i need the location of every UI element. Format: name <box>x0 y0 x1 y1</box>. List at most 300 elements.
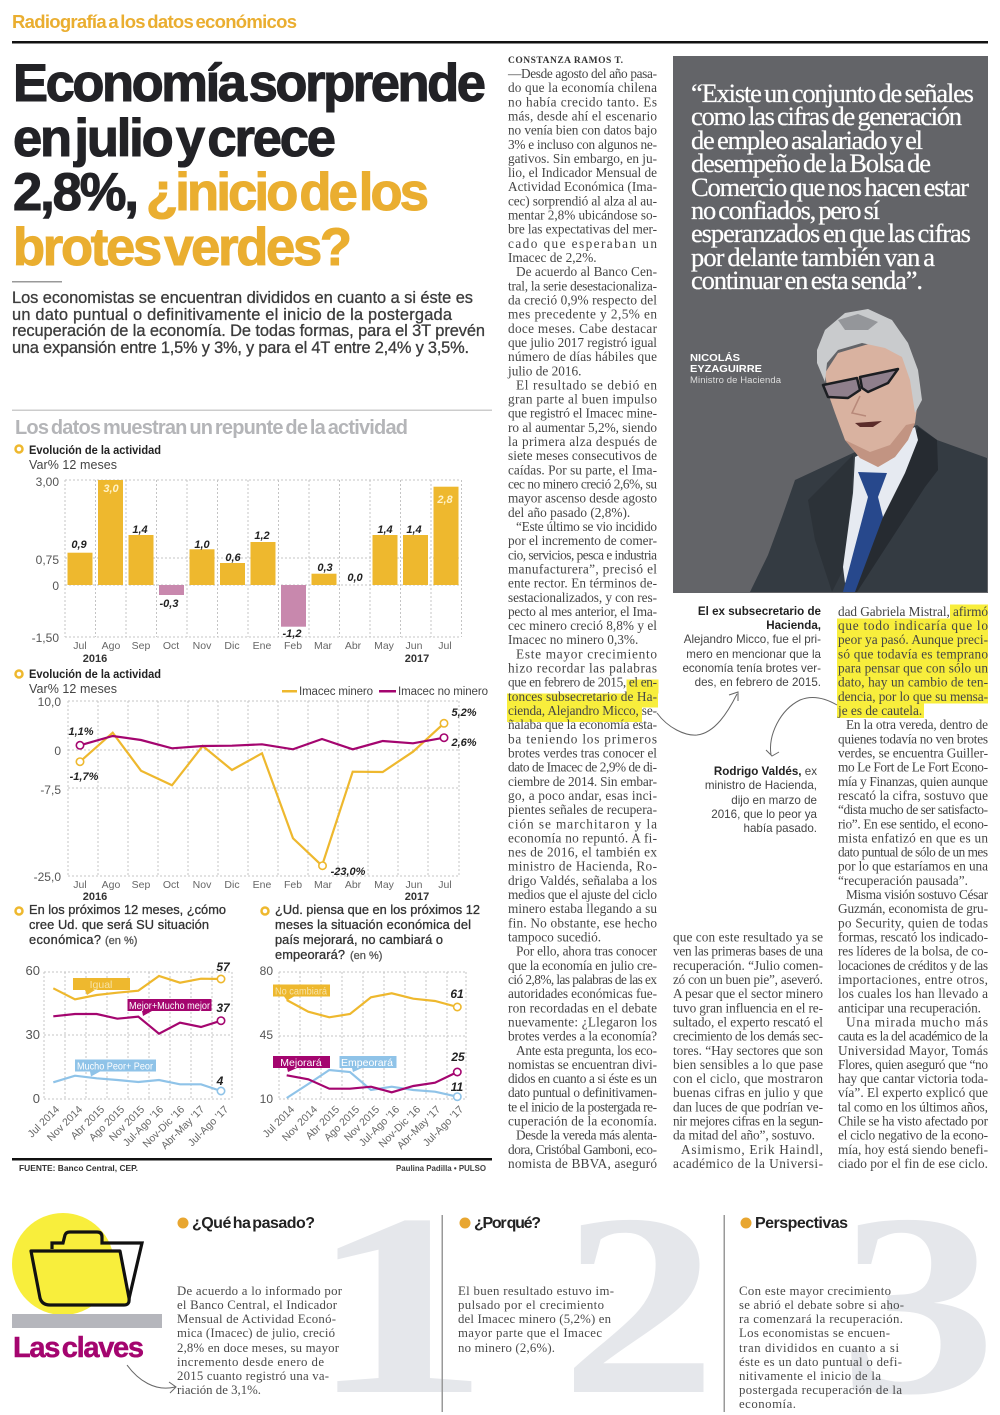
chart: national economic situation survey: país mejorará, no cambiará o <box>275 932 443 947</box>
speaker name: NICOLÁS <box>690 351 740 364</box>
article column 1: siete meses consecutivos de <box>508 448 657 463</box>
article column 2: dan luces de que podrían ve- <box>673 1099 823 1114</box>
chart: personal economic situation survey: Nov-Dic '16 <box>140 1104 187 1150</box>
callout: Rodrigo Valdés: dijo en marzo de <box>731 794 817 807</box>
chart: personal economic situation survey: Jul-Ago '17 <box>186 1104 231 1149</box>
chart: bar chart evolution of activity: 1,4 <box>377 524 393 536</box>
chart: national economic situation survey <box>260 902 480 1152</box>
chart: line chart imacec minero vs no minero: Jul <box>438 879 452 891</box>
quote text: continuar en esta senda”. <box>691 265 923 295</box>
chart: line chart imacec minero vs no minero: Oct <box>163 879 179 891</box>
subheadline: una expansión entre 1,5% y 3%, y para el 4T entre 2,4% y 3,5%. <box>12 339 469 357</box>
chart: personal economic situation survey: Ago 2015 <box>87 1104 127 1144</box>
article column 3: quienes todavía no ven brotes <box>838 731 988 746</box>
article column 3: locaciones de créditos y de las <box>838 958 988 973</box>
chart: national economic situation survey: Jul-Ago '17 <box>421 1104 466 1149</box>
headline: en julio y crece <box>13 109 336 168</box>
label: Igual: Igual <box>90 979 112 991</box>
chart: national economic situation survey: empeorará? <box>275 947 345 962</box>
article column 3: hay que cantar victoria toda- <box>838 1071 988 1086</box>
chart: line chart imacec minero vs no minero: Jun <box>406 879 423 891</box>
article column 1: El resultado se debió en <box>516 377 657 392</box>
subheadline: recuperación de la economía. De todas formas, para el 3T prevén <box>12 322 485 340</box>
chart: bar chart evolution of activity: Dic <box>224 640 240 652</box>
article column 3: que todo indicaría que lo <box>838 618 988 633</box>
article column 1: —Desde agosto del año pasa- <box>507 66 657 81</box>
article column 1: mentar 2,8% ubicándose so- <box>508 208 657 223</box>
chart: bar chart evolution of activity: Nov <box>193 640 212 652</box>
article column 3: dencia, por lo que su mensa- <box>838 689 988 704</box>
article column 3: formas, rescató los indicado- <box>838 930 988 944</box>
article column 1: Actividad Económica (Ima- <box>508 179 657 194</box>
source line <box>12 1158 492 1173</box>
article column 1: da creció 0,9% respecto del <box>508 292 657 308</box>
chart: bar chart evolution of activity <box>16 443 462 665</box>
article column 1: nomistas se encuentran divi- <box>508 1057 657 1072</box>
article column 3: mo Le Fort de Le Fort Econo- <box>838 760 988 775</box>
article column 1: Imacec de 2,2%. <box>508 250 597 265</box>
panel: por qué: no minero (2,6%). <box>458 1341 555 1355</box>
chart: line chart imacec minero vs no minero: May <box>374 879 395 891</box>
chart: personal economic situation survey: En los próximos 12 meses, ¿cómo <box>29 902 226 917</box>
chart: bar chart evolution of activity: May <box>374 640 395 652</box>
legend: Imacec minero <box>299 686 373 698</box>
subheadline <box>12 281 485 357</box>
chart: line chart imacec minero vs no minero: -23,0% <box>331 866 366 878</box>
chart: line chart imacec minero vs no minero <box>16 667 488 903</box>
chart: line chart imacec minero vs no minero: -7,5 <box>40 783 61 797</box>
callout: Alejandro Micco <box>682 605 822 689</box>
chart: personal economic situation survey: 60 <box>26 963 40 978</box>
panel: perspectivas: Los economistas se encuen- <box>739 1326 890 1340</box>
chart: national economic situation survey: 45 <box>260 1028 273 1042</box>
chart: line chart imacec minero vs no minero: Evolución de la actividad <box>29 667 161 681</box>
chart: bar chart evolution of activity: -0,3 <box>160 598 178 610</box>
chart: line chart imacec minero vs no minero: Var% 12 meses <box>29 682 117 696</box>
source line: FUENTE: Banco Central, CEP. <box>19 1163 138 1173</box>
article column 1: mes precedente y 2,5% en <box>508 307 657 322</box>
panel: qué ha pasado: 2015 cuanto registró una va- <box>177 1369 329 1383</box>
article column 2: tuvo gran influencia en el re- <box>673 1000 823 1015</box>
article column 3: por lo que estaríamos en una <box>838 859 988 874</box>
chart: line chart imacec minero vs no minero: Feb <box>284 879 302 891</box>
quote text: desempeño de la Bolsa de <box>691 148 931 178</box>
panel: perspectivas: postergada recuperación de la <box>739 1383 902 1397</box>
speaker name: Ministro de Hacienda <box>690 375 782 386</box>
article column 2: zó con un buen pie”, aseveró. <box>673 972 823 987</box>
chart: bar chart evolution of activity: Ago <box>102 640 120 652</box>
article column 1: ba teniendo los primeros <box>508 731 657 746</box>
chart: personal economic situation survey: 30 <box>26 1027 40 1042</box>
chart: line chart imacec minero vs no minero: 2017 <box>405 891 429 903</box>
panel: perspectivas: Perspectivas <box>755 1215 848 1232</box>
chart: bar chart evolution of activity: 0,9 <box>71 539 88 551</box>
chart: line chart imacec minero vs no minero: -25,0 <box>34 870 61 884</box>
article column 1: cec) sorprendió al alza al au- <box>508 193 657 208</box>
article column 2: bien sensibles a lo que pase <box>673 1057 823 1072</box>
article column 1: ñalaba que la economía esta- <box>508 717 657 732</box>
article column 1: dora, Cristóbal Gamboni, eco- <box>508 1142 657 1157</box>
headline: Economía sorprende <box>13 54 486 113</box>
chart: bar chart evolution of activity: Var% 12 meses <box>29 458 117 472</box>
article column 3: mista enfatizó en que es un <box>838 830 988 845</box>
callout: Alejandro Micco: economía tenía brotes ver- <box>682 662 821 675</box>
panel: perspectivas: ra comenzará la recuperación. <box>739 1312 903 1326</box>
article column 1: del año pasado (2,8%). <box>508 505 630 520</box>
chart: line chart imacec minero vs no minero: Nov <box>193 879 212 891</box>
label: Empeorará: Empeorará <box>341 1057 393 1069</box>
callout: Rodrigo Valdés: había pasado. <box>744 822 817 835</box>
article column 3: Universidad Mayor, Tomás <box>838 1043 988 1058</box>
chart: line chart imacec minero vs no minero: 0 <box>54 744 61 758</box>
chart: personal economic situation survey: 4 <box>216 1074 224 1088</box>
article column 2: da mitad del año”, sostuvo. <box>673 1128 815 1143</box>
article column 3: el ciclo negativo de la econo- <box>838 1128 988 1143</box>
article column 1: ministro de Hacienda, Ro- <box>508 859 657 874</box>
article column 1: ciembre de 2014. Sin embar- <box>508 774 657 789</box>
chart: bar chart evolution of activity: -1,50 <box>32 631 59 645</box>
chart: personal economic situation survey: económica? <box>29 932 101 947</box>
article column 1: nomista de BBVA, aseguró <box>508 1156 657 1171</box>
chart: bar chart evolution of activity: Mar <box>314 640 333 652</box>
label: Mucho Peor+Peor <box>75 1060 156 1076</box>
source line: Paulina Padilla • PULSO <box>396 1163 486 1173</box>
label: Igual <box>73 978 130 995</box>
panel: qué ha pasado: riación de 3,1%. <box>177 1383 261 1397</box>
chart: bar chart evolution of activity: Abr <box>345 640 362 652</box>
callout: Rodrigo Valdés <box>705 765 818 835</box>
article column 1: nes de 2016, el también ex <box>508 845 657 860</box>
arrow: claves pointer <box>127 1365 176 1393</box>
chart: bar chart evolution of activity: 1,4 <box>132 524 148 536</box>
article column 2: ven las primeras bases de una <box>673 944 823 959</box>
article column 3: “recuperación pausada”. <box>838 873 968 888</box>
legend: Imacec no minero <box>398 686 488 698</box>
chart: national economic situation survey: Jul 2014 <box>261 1104 297 1140</box>
chart: national economic situation survey: meses la situación económica del <box>275 917 471 932</box>
article column 3: mía y Finanzas, quien aunque <box>838 774 988 789</box>
chart: personal economic situation survey: (en %) <box>105 935 137 947</box>
article column 1: “Este último se vio incidido <box>516 519 657 534</box>
article column 1: CONSTANZA RAMOS T. <box>508 56 623 66</box>
article column 3: dato, hay un cambio de ten- <box>838 675 988 690</box>
article column 1: pientes señales de recupera- <box>508 802 657 817</box>
article column 1: fin. No obstante, ese hecho <box>508 915 657 930</box>
headline: ¿inicio de los <box>146 163 429 222</box>
panel: qué ha pasado: el Banco Central, el Indicador <box>177 1298 338 1312</box>
article column 3: verdes, se encuentra Guiller- <box>838 746 988 760</box>
chart: bar chart evolution of activity: Evolución de la actividad <box>29 443 161 457</box>
subheadline: Los economistas se encuentran divididos en cuanto a si éste es <box>12 289 473 307</box>
article column 1: no había crecido tanto. Es <box>508 94 657 109</box>
article column 1: gativos. Sin embargo, en ju- <box>508 151 657 166</box>
top rule <box>12 41 988 44</box>
article column 1: dato de Imacec de 2,9% de di- <box>508 760 657 775</box>
article column 1: Ante esta pregunta, los eco- <box>516 1043 657 1058</box>
article column 1: brotes verdes tras conocer el <box>508 746 657 760</box>
chart: line chart imacec minero vs no minero: 2016 <box>83 891 107 903</box>
chart: national economic situation survey: 10 <box>260 1092 273 1106</box>
article column 1: brotes verdes a la economía? <box>508 1029 657 1044</box>
panel: por qué: mayor parte que el Imacec <box>458 1326 602 1340</box>
article column 2: con el ciclo, que mostraron <box>673 1071 823 1086</box>
label: No cambiará: No cambiará <box>275 986 327 998</box>
divider <box>442 1215 443 1412</box>
article column 1: De acuerdo al Banco Cen- <box>516 264 657 279</box>
article column 1: pecto al mes anterior, el Ima- <box>508 604 657 619</box>
article column 3: dad Gabriela Mistral, afirmó <box>838 604 988 619</box>
chart: national economic situation survey: 11 <box>451 1080 464 1094</box>
callout: Alejandro Micco: Alejandro Micco, fue el pri- <box>684 633 821 646</box>
article column 3: po Security, quien de todas <box>838 915 988 930</box>
article column 1: go, a poco andar, esas inci- <box>508 788 657 803</box>
quote text: Comercio que nos hacen estar <box>691 172 969 202</box>
panel: perspectivas: se abrió el debate sobre si aho- <box>739 1298 904 1312</box>
chart: national economic situation survey: 80 <box>260 964 273 978</box>
headline: brotes verdes? <box>13 218 352 277</box>
panel: perspectivas: éste es un dato puntual o defi- <box>739 1355 902 1369</box>
article column 3: rio”. En ese sentido, el econo- <box>838 816 988 831</box>
panel: qué ha pasado: Mensual de Actividad Econó- <box>177 1312 336 1326</box>
chart: bar chart evolution of activity: Ene <box>253 640 271 652</box>
chart: personal economic situation survey: Jul-Ago '16 <box>121 1104 166 1149</box>
chart: bar chart evolution of activity: Sep <box>132 640 150 652</box>
article column 3: peor ya pasó. Aunque preci- <box>838 632 988 647</box>
article column 3: só que todavía es temprano <box>838 646 988 661</box>
panel: por qué: El buen resultado estuvo im- <box>458 1284 614 1298</box>
chart: national economic situation survey: 25 <box>450 1050 465 1064</box>
article column 1: cuperación de la economía. <box>508 1114 657 1129</box>
article column 1: no venía bien con datos bajo <box>508 123 657 138</box>
chart: national economic situation survey: Ago 2015 <box>322 1104 362 1144</box>
article column 2: buenas cifras en julio y que <box>673 1085 823 1100</box>
article column 1: Por ello, ahora tras conocer <box>516 944 658 959</box>
arrow: highlighted text to Micco callout <box>657 692 738 735</box>
chart: bar chart evolution of activity: Feb <box>284 640 302 652</box>
panel: Las claves logo <box>12 1213 176 1393</box>
graphics heading: Los datos muestran un repunte de la actividad <box>15 417 408 439</box>
chart: national economic situation survey: Abr 2015 <box>303 1104 342 1142</box>
article column 1: por el incremento de comer- <box>508 533 657 548</box>
speaker name <box>690 351 782 386</box>
panel: quote from Nicolás Eyzaguirre <box>673 56 988 593</box>
chart: personal economic situation survey: cree Ud. que será SU situación <box>29 917 209 932</box>
panel: perspectivas <box>739 1161 997 1415</box>
panel: qué ha pasado: ¿Qué ha pasado? <box>192 1215 315 1232</box>
subheadline: un dato puntual o definitivamente el inicio de la postergada <box>12 306 453 324</box>
panel: perspectivas: nitivamente el inicio de la <box>739 1369 881 1383</box>
label: Mejor+Mucho mejor: Mejor+Mucho mejor <box>129 1000 210 1012</box>
article column 2: crecimiento de los demás sec- <box>673 1029 823 1044</box>
chart: line chart imacec minero vs no minero: Ago <box>102 879 120 891</box>
article column 1: julio de 2016. <box>507 363 582 378</box>
article column 3: ciado por el fin de ese ciclo. <box>838 1156 988 1171</box>
chart: bar chart evolution of activity: 2016 <box>83 653 107 665</box>
article column 1: ente rector. En términos de- <box>508 576 657 591</box>
article column 1: dato puntual o definitivamen- <box>508 1085 657 1100</box>
article column 1: doce meses. Cabe destacar <box>508 321 658 336</box>
article column 3: para pensar que con sólo un <box>838 661 988 676</box>
panel: por qué: ¿Por qué? <box>474 1215 541 1232</box>
article column 2: sultado, el experto rescató el <box>673 1014 823 1030</box>
article column 1: autoridades económicas fue- <box>508 986 657 1001</box>
chart: bar chart evolution of activity: 0,75 <box>36 553 59 567</box>
article column 1: nuevamente: ¿Llegaron los <box>508 1014 657 1030</box>
chart: national economic situation survey: Nov 2014 <box>280 1104 320 1144</box>
article column 1: cec no minero creció 2,6%, su <box>508 476 657 492</box>
chart: national economic situation survey: Jul-Ago '16 <box>357 1104 402 1149</box>
chart: bar chart evolution of activity: -1,2 <box>283 628 301 640</box>
article column 1: lio, el Indicador Mensual de <box>508 165 657 180</box>
chart: line chart imacec minero vs no minero: 5,2% <box>451 707 477 719</box>
article column 1: ció 2,8%, las palabras de las ex <box>508 972 657 987</box>
chart: national economic situation survey: 61 <box>450 987 464 1001</box>
article column 1: hizo recordar las palabras <box>508 661 657 676</box>
section tag: Radiografía a los datos económicos <box>12 11 297 32</box>
chart: national economic situation survey: (en %) <box>350 950 382 962</box>
article column 1: mayor ascenso desde agosto <box>508 491 657 506</box>
article column 1: que julio 2017 registró igual <box>508 335 657 350</box>
chart: personal economic situation survey: Jul 2014 <box>26 1104 62 1140</box>
quote text: de empleo asalariado y el <box>691 125 923 155</box>
chart: bar chart evolution of activity: 1,2 <box>254 530 270 542</box>
article column 1: te el inicio de la postergada re- <box>508 1099 657 1114</box>
article column 3: res líderes de la bolsa, de co- <box>838 944 988 959</box>
chart: bar chart evolution of activity: 1,4 <box>406 524 422 536</box>
panel: por qué: pulsado por el crecimiento <box>458 1298 604 1312</box>
quote text: no confiados, pero sí <box>691 195 881 225</box>
quote text: como las cifras de generación <box>691 101 962 131</box>
article column 1: cienda, Alejandro Micco, se- <box>508 703 657 718</box>
panel: perspectivas: Con este mayor crecimiento <box>739 1284 891 1298</box>
article column 1: drigo Valdés, señalaba a los <box>508 873 657 888</box>
label: Mejorará <box>273 1056 330 1072</box>
article column 3: importaciones, entre otros, <box>838 972 988 987</box>
chart: line chart imacec minero vs no minero: 10,0 <box>38 695 61 709</box>
article column 3: rescató la cifra, sostuvo que <box>838 788 988 803</box>
chart: personal economic situation survey: Abr 2015 <box>68 1104 107 1142</box>
article column 3: anticipar una recuperación. <box>838 1000 981 1015</box>
speaker name: EYZAGUIRRE <box>690 363 762 375</box>
chart: national economic situation survey: Nov-Dic '16 <box>376 1104 423 1150</box>
article column 1: cio, servicios, pesca e industria <box>508 547 657 562</box>
article column 3: Guzmán, economista de gru- <box>838 901 988 916</box>
chart: national economic situation survey: ¿Ud. piensa que en los próximos 12 <box>275 902 480 917</box>
article column 3: los cuales los han llevado a <box>838 986 988 1001</box>
article column 1: número de días hábiles que <box>508 349 657 364</box>
quote text <box>691 78 974 295</box>
article column 1: tral, la serie desestacionaliza- <box>508 278 657 293</box>
panel: perspectivas: tran divididos en cuanto a si <box>739 1341 899 1355</box>
arrow: highlighted text to Valdés callout <box>766 698 837 756</box>
article column 1: medios que el ajuste del ciclo <box>508 887 657 902</box>
quote text: esperanzados en que las cifras <box>691 218 971 248</box>
article column 3: “dista mucho de ser satisfacto- <box>838 802 988 817</box>
panel: qué ha pasado: mica (Imacec) de julio, creció <box>177 1326 335 1340</box>
label: No cambiará <box>273 984 330 1000</box>
icon: folder on yellow circle <box>12 1213 142 1315</box>
article column 2: académico de la Universi- <box>673 1156 823 1171</box>
article column 1: ción se marchitaron y la <box>508 816 657 831</box>
quote text: por delante también van a <box>691 242 935 272</box>
panel: qué ha pasado <box>177 1161 490 1415</box>
article column 3: vía”. El experto explicó que <box>838 1085 988 1100</box>
headline: 2,8%, <box>13 163 139 222</box>
callout: Alejandro Micco: El ex subsecretario de <box>698 605 822 618</box>
article column 1: manufacturera”, precisó el <box>508 562 657 576</box>
article column 1: ro al aumentar 5,2%, siendo <box>508 420 657 435</box>
article column 1: bre las expectativas del mer- <box>508 222 657 237</box>
panel: perspectivas: economía. <box>739 1397 796 1411</box>
chart: bar chart evolution of activity: 2,8 <box>436 494 454 506</box>
callout: Alejandro Micco: Hacienda, <box>766 619 821 632</box>
article column 1: cec minero creció 8,8% y el <box>508 618 657 633</box>
chart: bar chart evolution of activity: 3,00 <box>36 475 59 489</box>
article column 3 <box>837 604 989 1171</box>
article column 1: do que la economía chilena <box>508 80 657 95</box>
article column 1: Imacec no minero 0,3%. <box>508 632 638 647</box>
article column 1: economía no repuntó. A fi- <box>508 830 657 845</box>
callout: Alejandro Micco: mero en mencionar que la <box>686 648 822 661</box>
headline <box>13 54 486 277</box>
article column 1: Desde la vereda más alenta- <box>516 1128 657 1143</box>
callout: Rodrigo Valdés: Rodrigo Valdés, ex <box>714 765 817 778</box>
divider <box>724 1215 725 1412</box>
chart: line chart imacec minero vs no minero: Abr <box>345 879 362 891</box>
article column 3: je es de cautela. <box>837 703 922 718</box>
article column 1: cado que esperaban un <box>508 236 657 251</box>
article column 1: la primera alza después de <box>508 434 657 449</box>
article column 1: minero estaba llegando a su <box>508 901 657 916</box>
chart: line chart imacec minero vs no minero: -1,7% <box>70 771 99 783</box>
chart: personal economic situation survey: Abr-May '17 <box>159 1104 207 1152</box>
chart: line chart imacec minero vs no minero: 2,6% <box>450 737 477 749</box>
chart: bar chart evolution of activity: 0 <box>52 579 59 593</box>
callout: Rodrigo Valdés: 2016, que lo peor ya <box>711 808 818 821</box>
chart: line chart imacec minero vs no minero: Sep <box>132 879 150 891</box>
article column 1: Este mayor crecimiento <box>516 646 657 661</box>
article column 3: En la otra vereda, dentro de <box>846 717 988 732</box>
panel: qué ha pasado: incremento desde enero de <box>177 1355 324 1369</box>
article column 2: que con este resultado ya se <box>673 930 823 944</box>
article column 3: Misma visión sostuvo César <box>846 887 989 902</box>
chart: national economic situation survey: Abr-May '17 <box>395 1104 443 1152</box>
legend <box>282 686 488 698</box>
chart: personal economic situation survey: Nov 2015 <box>107 1104 147 1144</box>
article column 1: sestacionalizados, y con res- <box>508 590 657 605</box>
chart: bar chart evolution of activity: 0,6 <box>225 552 242 564</box>
article column 1 <box>507 56 658 1171</box>
article column 1: gran parte al buen impulso <box>508 392 657 407</box>
article column 3: mía, hoy está siendo benefi- <box>838 1142 988 1157</box>
article column 2: Asimismo, Erik Haindl, <box>681 1142 823 1157</box>
chart: bar chart evolution of activity: Oct <box>163 640 179 652</box>
chart: line chart imacec minero vs no minero: Mar <box>314 879 333 891</box>
chart: bar chart evolution of activity: 0,0 <box>347 572 364 584</box>
article column 1: que registró el Imacec mine- <box>508 406 657 421</box>
quote text: “Existe un conjunto de señales <box>691 78 974 108</box>
article column 3: dato puntual de sólo de un mes <box>838 845 988 860</box>
article column 2: tores. “Hay sectores que son <box>673 1043 823 1058</box>
article column 3: Una mirada mucho más <box>846 1014 988 1030</box>
chart: line chart imacec minero vs no minero: Ene <box>253 879 271 891</box>
chart: line chart imacec minero vs no minero: 1,1% <box>68 726 94 738</box>
chart: bar chart evolution of activity: 0,3 <box>317 562 333 574</box>
article column 1: tampoco sucedió. <box>508 930 601 944</box>
panel: qué ha pasado: De acuerdo a lo informado por <box>177 1284 343 1298</box>
article column 2: nir mejores cifras en la segun- <box>673 1114 823 1129</box>
article column 1: que en febrero de 2015, el en- <box>508 675 657 690</box>
